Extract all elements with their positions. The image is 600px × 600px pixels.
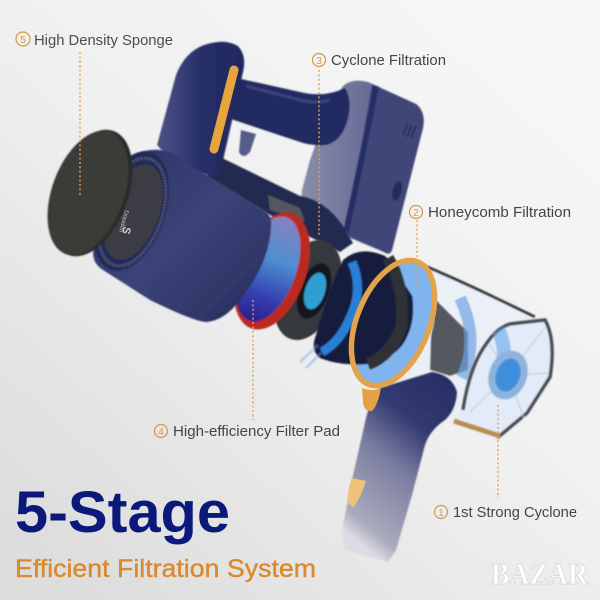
sponge <box>32 118 148 268</box>
cap disc <box>91 156 175 268</box>
brand mark: Dopidoo <box>117 209 129 233</box>
dotted leader lines <box>80 52 498 498</box>
orange grip patch <box>347 478 366 507</box>
handle bar and lower strut <box>205 77 353 252</box>
orange latch <box>362 388 381 411</box>
bin end cap <box>454 320 552 440</box>
rear block <box>300 81 424 254</box>
vent grille <box>79 141 183 281</box>
blue glow inside ring <box>335 249 451 397</box>
label 1: 1st strong cyclone: 1st Strong Cyclone <box>453 504 577 521</box>
motor body <box>93 150 271 322</box>
label 5: high density sponge: 5 <box>20 35 26 46</box>
watermark: BAZAR <box>491 556 589 591</box>
orange ring <box>335 248 451 398</box>
head <box>157 42 244 178</box>
label 3: cyclone filtration: 3 <box>316 56 322 67</box>
transparent dust bin <box>385 262 552 438</box>
brand mark: S <box>119 225 133 235</box>
red filter ring <box>219 202 325 340</box>
airflow wisps <box>300 345 322 368</box>
dark motor stage <box>314 251 432 368</box>
label 2: honeycomb filtration: Honeycomb Filtration <box>428 204 571 221</box>
handle grip <box>342 372 457 562</box>
subtitle: Efficient Filtration System <box>15 555 316 583</box>
brand mark <box>117 209 133 235</box>
label 4: high-efficiency filter pad: 4 <box>158 427 164 438</box>
label 3: cyclone filtration: Cyclone Filtration <box>331 52 446 69</box>
label 5: high density sponge: High Density Sponge <box>34 32 173 49</box>
label 2: honeycomb filtration: 2 <box>413 208 419 219</box>
vacuum cleaner exploded view <box>32 42 552 562</box>
title: 5-Stage <box>15 480 230 545</box>
orange strip <box>214 70 234 149</box>
label 1: 1st strong cyclone: 1 <box>438 508 444 519</box>
label 4: high-efficiency filter pad: High-efficiency Filter Pad <box>173 423 340 440</box>
black filter housing <box>261 231 355 349</box>
